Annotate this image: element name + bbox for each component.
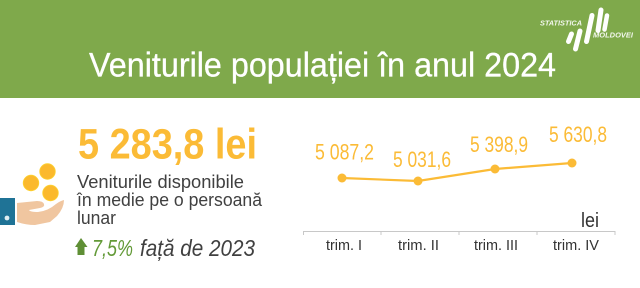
- logo: Statistica Moldovei: [540, 10, 634, 49]
- text block: description: [76, 171, 263, 228]
- text block: description: în medie pe o persoană: [76, 189, 263, 210]
- line chart: [304, 122, 615, 254]
- data labels: [315, 122, 607, 172]
- callout: growth: 7,5%: [92, 235, 133, 261]
- text block: description: Veniturile disponibile: [77, 171, 244, 192]
- data labels: 5 087,2: [315, 140, 374, 164]
- callout: growth: [92, 235, 255, 261]
- axis labels: trim. IV: [553, 238, 599, 254]
- data labels: 5 630,8: [549, 122, 607, 147]
- data labels: 5 398,9: [470, 132, 528, 157]
- axis labels: trim. II: [398, 238, 439, 254]
- panel: header band: [0, 0, 640, 98]
- icon: up arrow: [75, 238, 88, 255]
- callout: growth: față de 2023: [140, 235, 255, 261]
- icon: hand with coins: [0, 164, 64, 225]
- title: Veniturile populației în anul 2024: [89, 46, 556, 84]
- axis labels: [326, 238, 599, 254]
- axis labels: trim. III: [474, 238, 518, 254]
- unit label: lei: [581, 210, 599, 232]
- logo: Statistica Moldovei: MOLDOVEI: [593, 32, 634, 40]
- icon: coins: [23, 164, 58, 201]
- axis labels: trim. I: [326, 238, 362, 254]
- icon: sleeve: [0, 198, 15, 225]
- icon: hand: [17, 200, 64, 225]
- big number: 5 283,8 lei: [78, 120, 257, 168]
- logo: Statistica Moldovei: STATISTICA: [540, 20, 582, 28]
- data labels: 5 031,6: [393, 147, 451, 172]
- text block: description: lunar: [77, 207, 116, 228]
